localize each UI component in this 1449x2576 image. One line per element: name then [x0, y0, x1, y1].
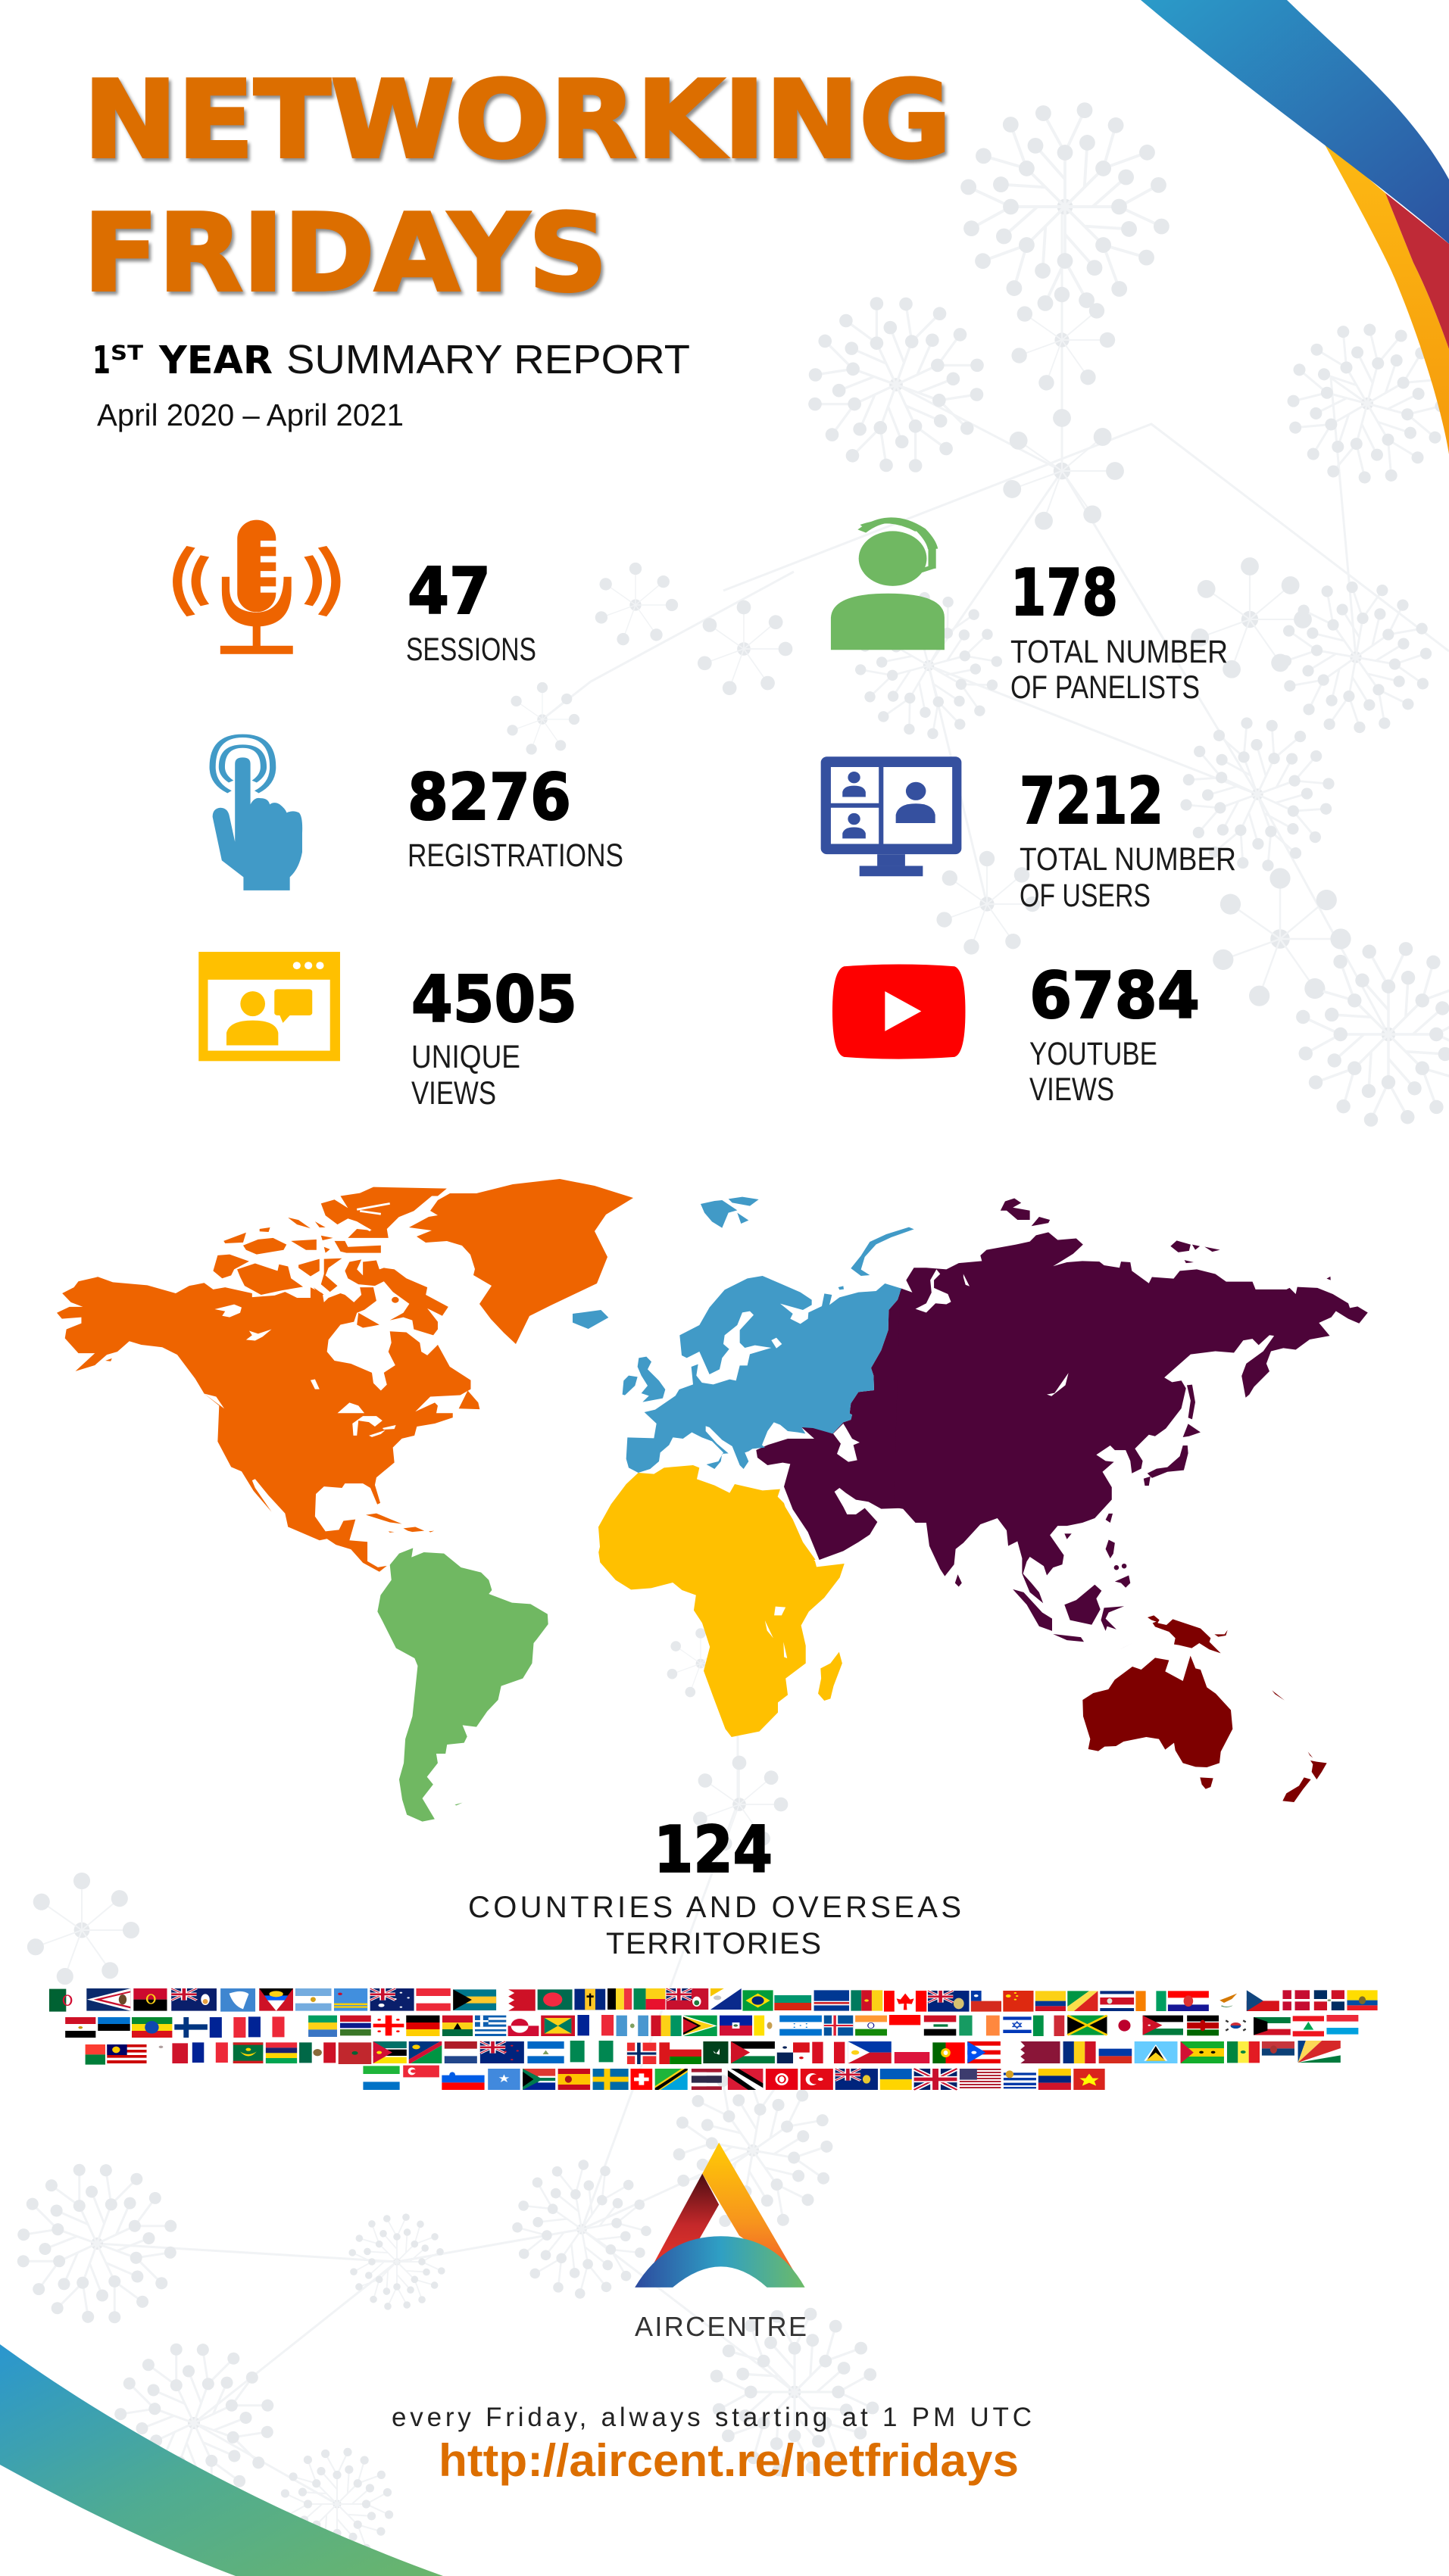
title: FRIDAYS — [83, 192, 607, 316]
icon: web window with speaker — [198, 952, 340, 1061]
country count: 124 — [654, 1813, 773, 1888]
logo wordmark: AIRCENTRE — [635, 2311, 807, 2342]
number: 6784 — [1029, 959, 1200, 1034]
bottom left ribbon — [0, 2344, 443, 2576]
flags strip — [49, 1988, 1378, 2090]
label: REGISTRATIONS — [408, 837, 623, 874]
number: 47 — [408, 554, 491, 629]
count label — [468, 1891, 961, 1960]
map: greenland — [409, 1179, 633, 1344]
icon: headset person — [831, 520, 945, 650]
date range: April 2020 – April 2021 — [97, 398, 404, 432]
icon: pointing hand — [213, 736, 302, 890]
label: TOTAL NUMBER — [1010, 634, 1228, 670]
title — [83, 58, 951, 316]
number: 8276 — [408, 760, 571, 835]
stat: panelists — [831, 520, 1228, 706]
top right ribbon — [1141, 0, 1449, 454]
subtitle — [92, 337, 690, 383]
number: 4505 — [411, 962, 577, 1037]
logo mark — [635, 2143, 805, 2288]
label: OF PANELISTS — [1010, 669, 1200, 706]
stat: users — [821, 756, 1236, 914]
flags: right half — [707, 1988, 1378, 2090]
label: VIEWS — [1029, 1071, 1114, 1108]
world map — [57, 1179, 1368, 1822]
subtitle: SUMMARY REPORT — [286, 337, 690, 382]
count label: TERRITORIES — [606, 1927, 821, 1960]
map: oceania — [1082, 1615, 1327, 1802]
schedule line: every Friday, always starting at 1 PM UTC — [392, 2403, 1032, 2432]
subtitle: ST — [111, 341, 144, 365]
subtitle: YEAR — [158, 338, 273, 383]
map: asia west — [756, 1289, 919, 1560]
country count — [468, 1813, 961, 1960]
logo: air centre — [635, 2143, 807, 2342]
label: OF USERS — [1020, 878, 1151, 914]
icon: youtube play button — [832, 965, 965, 1059]
flags: left half — [49, 1988, 720, 2090]
label: SESSIONS — [406, 632, 536, 668]
number: 7212 — [1020, 764, 1163, 839]
label: TOTAL NUMBER — [1020, 841, 1236, 878]
stat: unique views — [198, 952, 577, 1112]
label — [1020, 841, 1236, 914]
subtitle: 1 — [92, 338, 111, 383]
label: VIEWS — [411, 1075, 496, 1112]
map: asia east — [894, 1198, 1368, 1649]
stat: youtube views — [832, 959, 1200, 1108]
label: UNIQUE — [411, 1039, 520, 1075]
label — [1029, 1036, 1157, 1108]
label — [1010, 634, 1228, 706]
count label: COUNTRIES AND OVERSEAS — [468, 1891, 961, 1924]
map: africa — [598, 1465, 845, 1737]
stat: sessions — [177, 520, 536, 668]
stat: registrations — [213, 736, 623, 890]
icon: microphone — [177, 520, 336, 654]
title: NETWORKING — [83, 58, 951, 182]
map: north america — [57, 1187, 479, 1572]
icon: video call monitor — [821, 756, 961, 876]
map: south america — [377, 1548, 548, 1822]
map: europe — [573, 1197, 914, 1473]
number: 178 — [1010, 556, 1118, 631]
label — [411, 1039, 520, 1112]
url: http://aircent.re/netfridays — [439, 2435, 1019, 2486]
label: YOUTUBE — [1029, 1036, 1157, 1072]
